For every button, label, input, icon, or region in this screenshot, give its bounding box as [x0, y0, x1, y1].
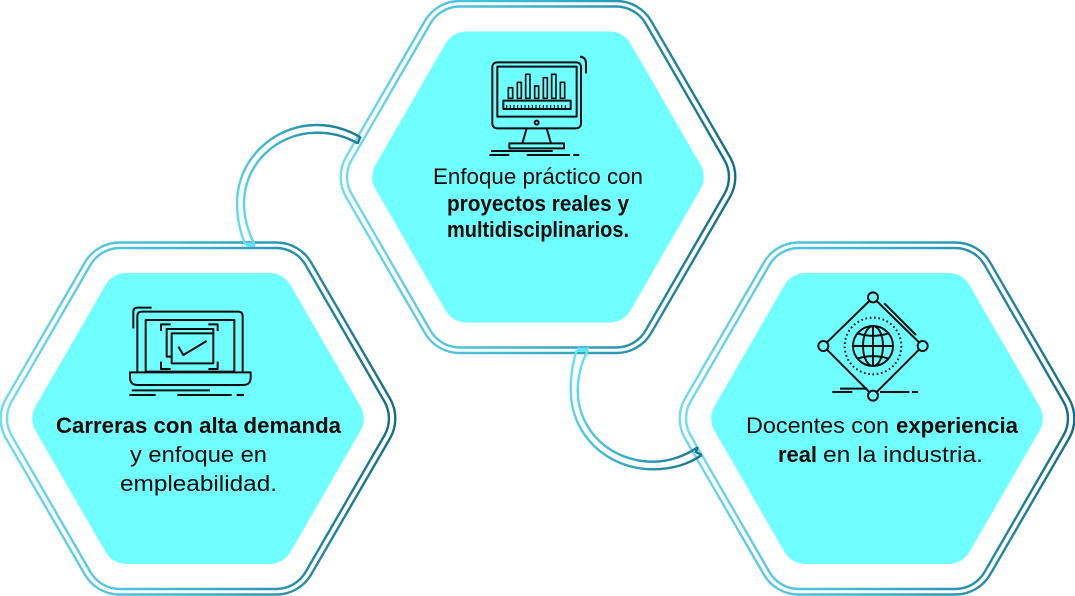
right hexagon text: en la industria. [823, 442, 983, 467]
left hexagon text: y enfoque en [130, 442, 267, 467]
top hexagon text [433, 164, 643, 242]
icon: globe in network diamond [818, 292, 928, 401]
top hexagon outer ring [341, 1, 735, 353]
right hexagon text [746, 413, 1019, 467]
top hexagon text: multidisciplinarios. [447, 217, 629, 242]
arrow: connector from top hexagon to right hexagon [571, 348, 702, 469]
top hexagon cyan fill [372, 32, 704, 322]
top hexagon text: Enfoque práctico con [433, 164, 643, 189]
right hexagon text: real [778, 442, 817, 467]
panel: left hexagon [1, 242, 395, 594]
right hexagon text: Docentes con [746, 413, 889, 438]
top hexagon inner ring [347, 6, 729, 348]
right hexagon cyan fill [711, 273, 1043, 564]
right hexagon outer ring [680, 242, 1074, 594]
arrow: connector from left hexagon to top hexagon [237, 125, 360, 246]
left hexagon outer ring [1, 242, 395, 594]
right hexagon text: experiencia [896, 413, 1019, 438]
right hexagon inner ring [686, 248, 1068, 589]
left hexagon text: empleabilidad. [120, 471, 277, 496]
left hexagon text [56, 413, 342, 496]
icon: monitor with bar chart [489, 57, 586, 155]
left hexagon cyan fill [32, 273, 364, 564]
top hexagon text: proyectos reales y [447, 191, 630, 216]
panel: right hexagon [680, 242, 1074, 594]
left hexagon inner ring [7, 248, 389, 589]
left hexagon text: Carreras con alta demanda [56, 413, 342, 438]
panel: top hexagon [341, 1, 735, 353]
icon: laptop with checkmark [129, 308, 251, 395]
